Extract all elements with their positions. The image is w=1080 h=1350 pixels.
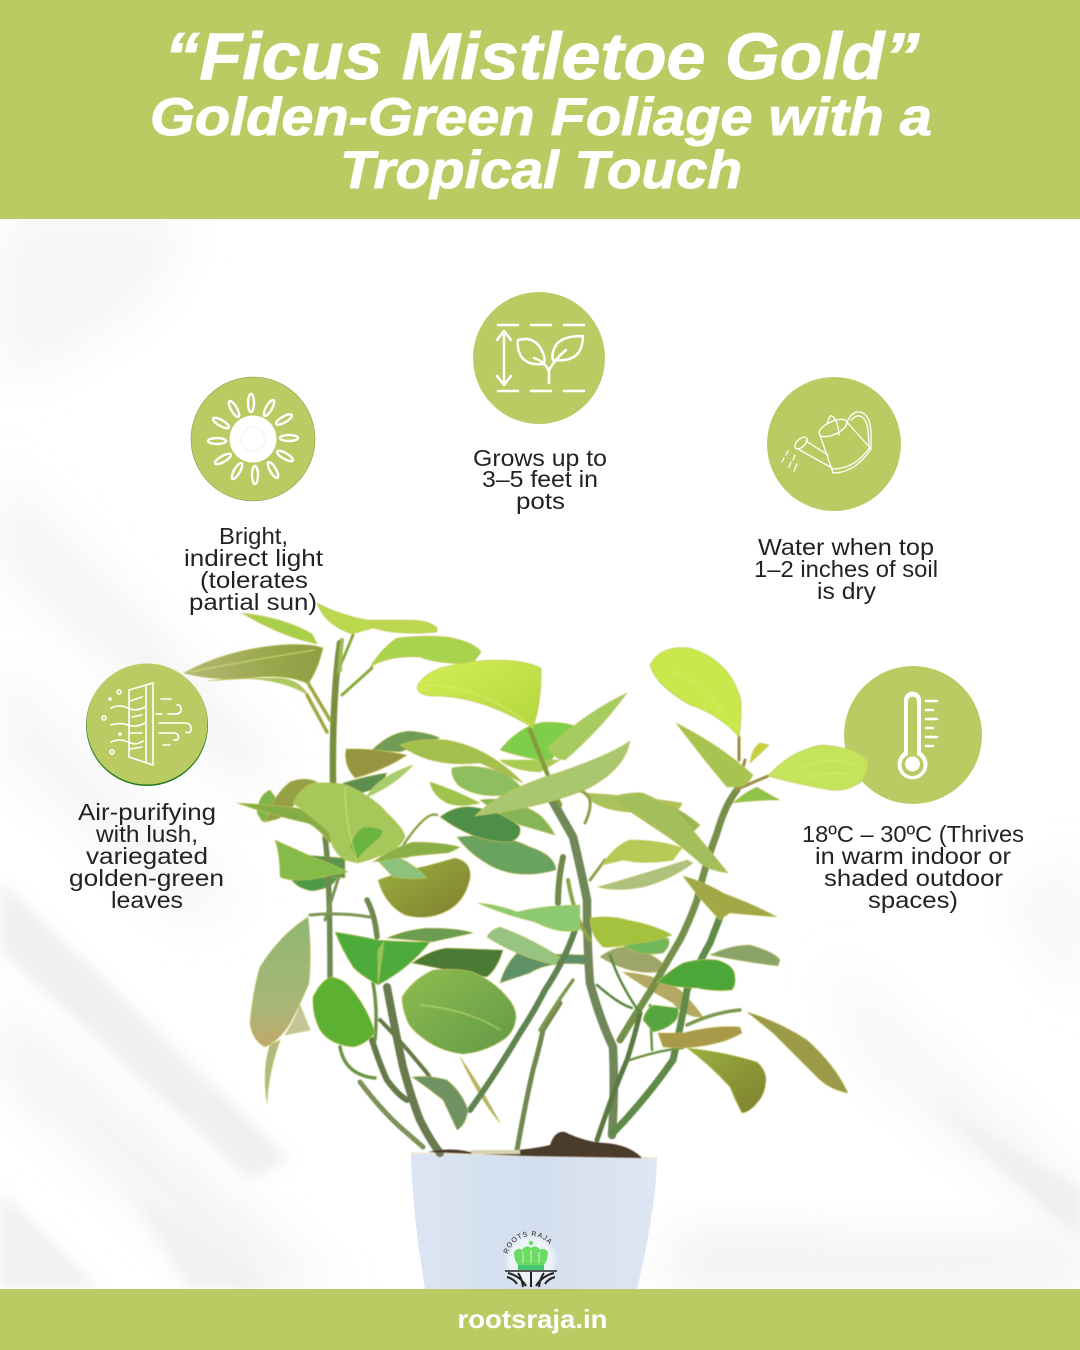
logo: Roots Raja: ROOTS RAJA: [503, 1231, 552, 1254]
icon: air purifying: [86, 664, 208, 786]
icon: thermometer: [844, 666, 982, 804]
text: water: [754, 534, 938, 604]
text: air purifying: with lush,: [95, 821, 198, 847]
title: [150, 19, 932, 200]
header band: [0, 0, 1080, 219]
title: “Ficus Mistletoe Gold”: [164, 19, 919, 93]
text: light: partial sun): [189, 589, 317, 615]
background: white with soft silk streaks: [0, 219, 1080, 1289]
soil: [428, 1132, 642, 1158]
text: height: 3–5 feet in: [482, 466, 598, 492]
text: temperature: [802, 821, 1024, 913]
icon: plant height: [473, 292, 605, 424]
footer text: website: rootsraja.in: [458, 1304, 608, 1334]
text: light: (tolerates: [200, 567, 308, 593]
text: height: [473, 445, 607, 514]
text: temperature: in warm indoor or: [815, 843, 1011, 869]
text: temperature: spaces): [868, 887, 958, 913]
leaf highlights: [190, 650, 855, 1030]
text: temperature: shaded outdoor: [824, 865, 1003, 891]
back leaves: [208, 678, 780, 1123]
text: light: [184, 523, 324, 615]
front leaves: [184, 603, 868, 1130]
text: temperature: 18ºC – 30ºC (Thrives: [802, 821, 1024, 847]
text: air purifying: variegated: [86, 843, 208, 869]
title: Tropical Touch: [340, 141, 742, 200]
text: air purifying: [69, 799, 224, 913]
icon: sun: [191, 377, 315, 501]
plant: [184, 603, 868, 1158]
text: light: Bright,: [219, 523, 288, 549]
text: air purifying: Air-purifying: [78, 799, 216, 825]
footer band: [0, 1289, 1080, 1350]
text: height: pots: [516, 488, 565, 514]
text: light: indirect light: [184, 545, 324, 571]
text: air purifying: leaves: [111, 887, 183, 913]
text: water: Water when top: [758, 534, 934, 560]
icon: watering can: [767, 377, 901, 511]
text: height: Grows up to: [473, 445, 607, 471]
logo: Roots Raja: [503, 1231, 557, 1288]
pot: [411, 1152, 657, 1289]
text: water: 1–2 inches of soil: [754, 556, 938, 582]
title: Golden-Green Foliage with a: [150, 88, 932, 147]
text: air purifying: golden-green: [69, 865, 224, 891]
text: water: is dry: [817, 578, 877, 604]
stems: [307, 635, 768, 1153]
